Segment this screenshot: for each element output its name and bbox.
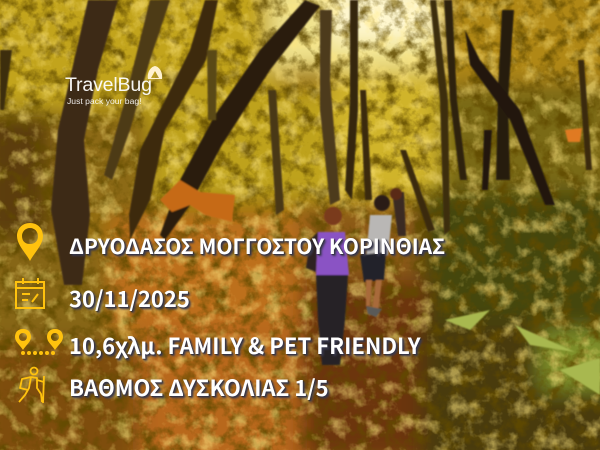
logo (65, 66, 162, 106)
logo wordmark: TravelBug (65, 74, 152, 96)
logo tagline: Just pack your bag! (67, 96, 142, 106)
tree trunks (0, 0, 592, 285)
hikers (306, 188, 406, 365)
text: date: 30/11/2025 (69, 282, 190, 314)
icon: hiker (18, 366, 45, 403)
logo icon: backpack (148, 66, 162, 79)
icon: route with two pins (15, 329, 63, 355)
orange foliage (160, 180, 235, 222)
text: distance: 10,6χλμ. FAMILY & PET FRIENDLY (69, 329, 420, 361)
second hiker (374, 195, 390, 211)
icon: calendar (15, 278, 45, 309)
front hiker (324, 207, 342, 225)
text: difficulty: ΒΑΘΜΟΣ ΔΥΣΚΟΛΙΑΣ 1/5 (69, 371, 329, 403)
icon: location pin (17, 223, 43, 261)
distant hikers (392, 192, 406, 236)
ferns (445, 310, 600, 395)
heading: location: ΔΡΥΟΔΑΣΟΣ ΜΟΓΓΟΣΤΟΥ ΚΟΡΙΝΘΙΑΣ (69, 231, 445, 261)
